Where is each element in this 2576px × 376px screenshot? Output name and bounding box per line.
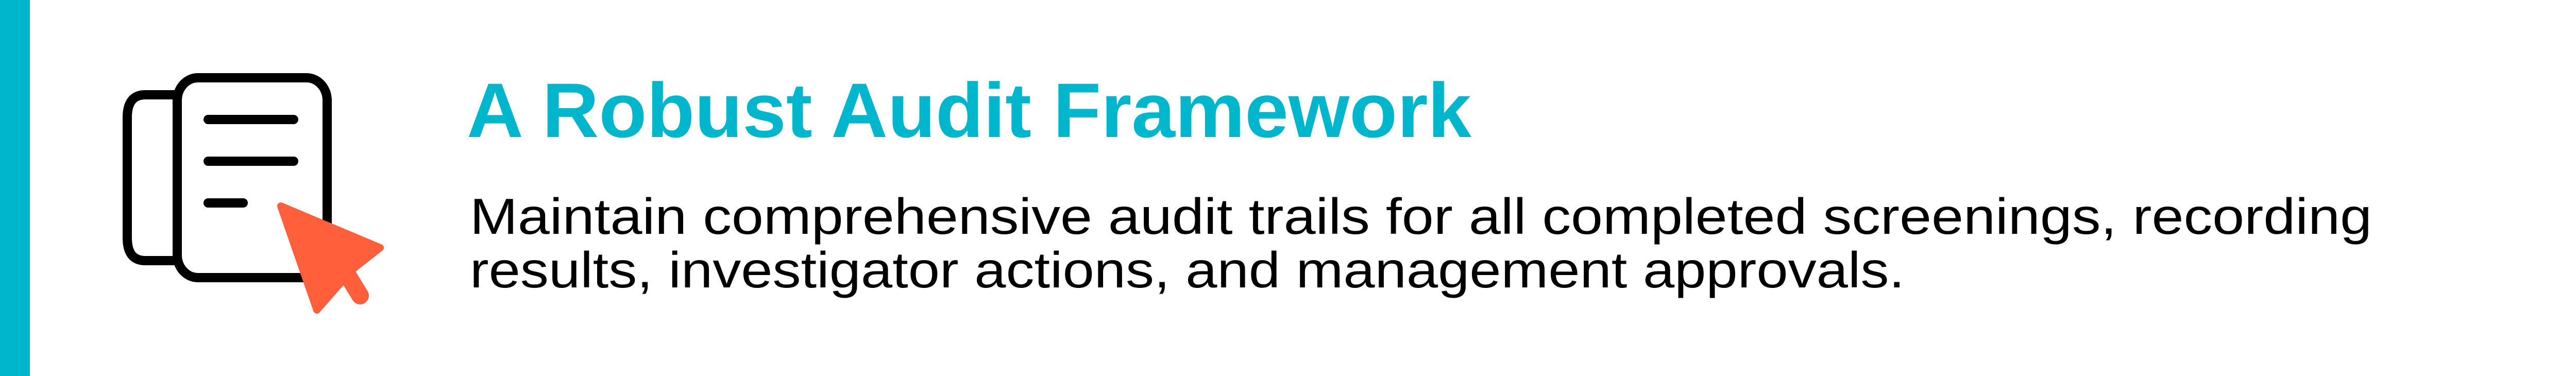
body text: Maintain comprehensive audit trails for all completed screenings, recording xyxy=(470,188,2372,245)
cursor arrow xyxy=(281,206,380,310)
body text: results, investigator actions, and management approvals. xyxy=(470,242,1905,298)
body text xyxy=(470,188,2372,298)
accent bar xyxy=(0,0,30,376)
back document xyxy=(127,95,177,261)
front document xyxy=(177,78,327,278)
icon: documents with cursor xyxy=(127,78,380,310)
text lines xyxy=(208,115,294,124)
title: A Robust Audit Framework xyxy=(467,67,1472,153)
